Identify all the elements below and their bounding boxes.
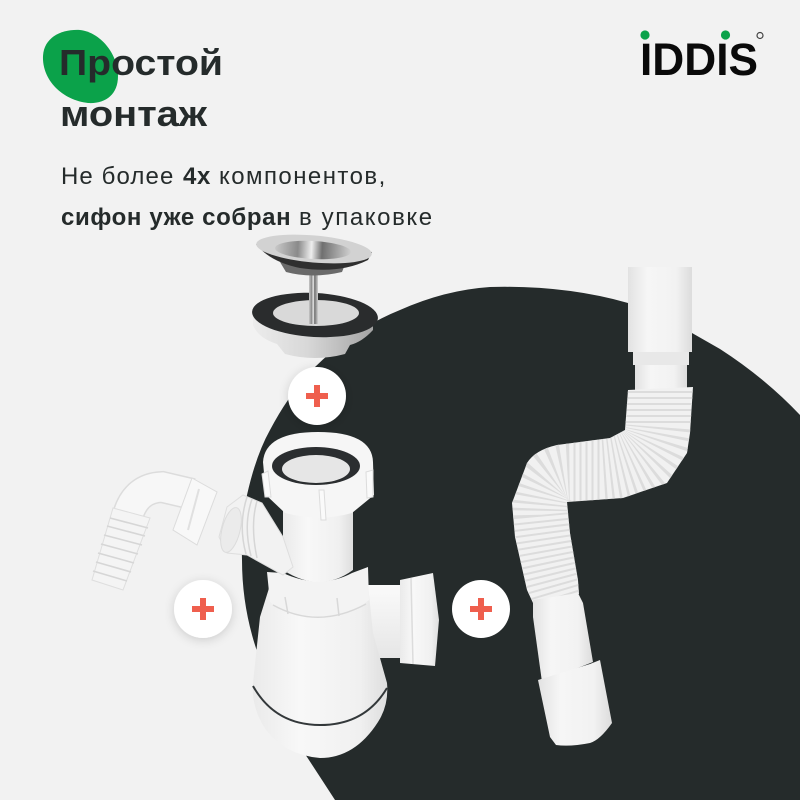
- product: siphon bottle trap: [217, 432, 439, 758]
- description text: в упаковке: [299, 204, 434, 231]
- lower collar: [538, 660, 612, 746]
- bottle body: [253, 585, 387, 758]
- description text: компонентов,: [219, 163, 387, 190]
- description text: 4х: [183, 163, 211, 190]
- top cup: [628, 267, 692, 352]
- title: монтаж: [60, 93, 208, 134]
- product: elbow hose connector: [92, 478, 217, 590]
- title: [59, 42, 223, 134]
- side outlet tube: [368, 585, 406, 658]
- plus badge: right: [452, 580, 510, 638]
- outlet nut: [400, 573, 439, 666]
- product: flexible corrugated pipe: [500, 267, 700, 746]
- green accent blob: [43, 30, 118, 103]
- title: Простой: [59, 42, 223, 83]
- dark background blob: [242, 287, 800, 800]
- lower sleeve: [533, 593, 593, 682]
- plus badge: left: [174, 580, 232, 638]
- black seal line: [253, 686, 387, 725]
- product: drain strainer: [251, 230, 379, 358]
- description text: [61, 163, 434, 231]
- logo: IDDIS: IDDIS: [640, 34, 758, 85]
- top nut: [263, 432, 374, 518]
- vertical tube: [283, 510, 353, 582]
- plus badge: top: [288, 367, 346, 425]
- side branch: [219, 495, 293, 575]
- corrugated hose: [512, 387, 693, 603]
- description text: сифон уже собран: [61, 204, 291, 231]
- description text: Не более: [61, 163, 174, 190]
- lower collar nut: [267, 567, 369, 616]
